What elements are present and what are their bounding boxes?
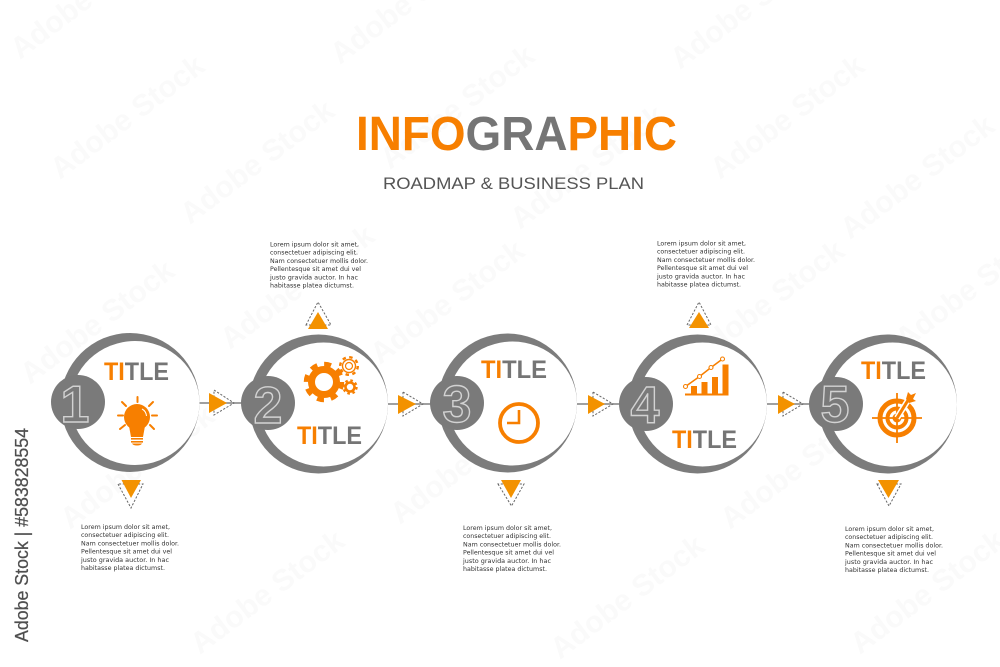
text block: step 3: justo gravida auctor. In hac [462, 557, 551, 565]
text block: step 1 [80, 523, 179, 572]
watermark: Adobe Stock [834, 109, 1000, 246]
text block: step 5: consectetuer adipiscing elit. [845, 533, 933, 541]
stock credit: Adobe Stock | #583828554 [12, 428, 32, 642]
connector arrow 4 to 5 [767, 392, 810, 416]
text block: step 1: habitasse platea dictumst. [81, 564, 165, 572]
text block: step 2: habitasse platea dictumst. [270, 282, 354, 290]
icon: growth chart [684, 357, 728, 396]
text block: step 4: habitasse platea dictumst. [657, 280, 741, 288]
watermark: Adobe Stock [44, 49, 211, 186]
connector arrow 3 to 4 [577, 392, 620, 416]
text block: step 5: Pellentesque sit amet dui vel [845, 550, 936, 558]
text block: step 5: Lorem ipsum dolor sit amet, [845, 525, 934, 533]
text block: step 5: Nam consectetuer mollis dolor. [845, 541, 943, 549]
panel: step 5 [809, 334, 957, 474]
watermark: Adobe Stock [184, 524, 351, 661]
watermark: Adobe Stock [714, 399, 881, 536]
panel: step 2 [241, 334, 388, 474]
pointer: step 5 down [877, 480, 901, 506]
watermark: Adobe Stock [364, 234, 531, 371]
text block: step 2: Nam consectetuer mollis dolor. [270, 257, 368, 265]
text block: step 3 [462, 524, 561, 573]
connector arrow 2 to 3 [387, 392, 431, 416]
text block: step 4: Lorem ipsum dolor sit amet, [657, 240, 746, 248]
text block: step 5: justo gravida auctor. In hac [844, 558, 933, 566]
watermark: Adobe Stock [704, 49, 871, 186]
text block: step 3: consectetuer adipiscing elit. [463, 532, 551, 540]
step 3 heading: TITLE [481, 356, 547, 384]
watermark: Adobe Stock [214, 219, 381, 356]
step 5 heading: TITLE [861, 357, 926, 385]
watermark: Adobe Stock [174, 94, 341, 231]
text block: step 2: Lorem ipsum dolor sit amet, [270, 240, 359, 248]
text block: step 3: Lorem ipsum dolor sit amet, [463, 524, 552, 532]
text block: step 1: Nam consectetuer mollis dolor. [81, 539, 179, 547]
number 4: 4 [631, 377, 660, 435]
text block: step 5: habitasse platea dictumst. [845, 566, 929, 574]
text block: step 4: justo gravida auctor. In hac [656, 272, 745, 280]
number 3: 3 [443, 376, 471, 434]
text block: step 5 [844, 525, 943, 574]
panel: step 4 [619, 334, 767, 474]
text block: step 4: consectetuer adipiscing elit. [657, 248, 745, 256]
text block: step 1: consectetuer adipiscing elit. [81, 531, 169, 539]
subtitle: ROADMAP & BUSINESS PLAN [383, 175, 644, 193]
pointer: step 4 up [687, 302, 711, 328]
watermark: Adobe Stock [684, 234, 851, 371]
text block: step 2: Pellentesque sit amet dui vel [270, 265, 361, 273]
watermark: Adobe Stock [54, 399, 221, 536]
watermark: Adobe Stock [14, 254, 181, 391]
watermark: Adobe Stock [384, 394, 551, 531]
text block: step 4 [656, 240, 755, 288]
icon: clock [500, 404, 538, 442]
watermark: Adobe Stock [374, 39, 541, 176]
number 2: 2 [254, 377, 282, 435]
pointer: step 1 down [118, 480, 143, 508]
icon: gears [306, 357, 358, 400]
panel: step 1 [51, 333, 200, 472]
text block: step 4: Pellentesque sit amet dui vel [657, 264, 748, 272]
step 2 heading: TITLE [297, 422, 362, 450]
icon: light bulb [118, 397, 157, 446]
watermark: Adobe Stock [504, 99, 671, 236]
step 1 heading: TITLE [104, 358, 169, 386]
step 4 heading: TITLE [672, 426, 737, 454]
text block: step 4: Nam consectetuer mollis dolor. [657, 256, 755, 264]
title: INFOGRAPHIC [356, 108, 677, 161]
watermark: Adobe Stock [544, 529, 711, 666]
number 1: 1 [61, 376, 89, 434]
pointer: step 3 down [498, 480, 524, 506]
text block: step 3: Pellentesque sit amet dui vel [463, 549, 554, 557]
text block: step 3: Nam consectetuer mollis dolor. [463, 540, 561, 548]
text block: step 1: justo gravida auctor. In hac [80, 556, 169, 564]
number 5: 5 [821, 376, 849, 434]
connector arrow 1 to 2 [198, 390, 242, 415]
text block: step 2: justo gravida auctor. In hac [269, 273, 358, 281]
icon: target with arrow [872, 392, 922, 443]
text block: step 1: Lorem ipsum dolor sit amet, [81, 523, 170, 531]
text block: step 2 [269, 240, 368, 290]
panel: step 3 [430, 334, 577, 472]
text block: step 1: Pellentesque sit amet dui vel [81, 548, 172, 556]
text block: step 3: habitasse platea dictumst. [463, 565, 547, 573]
text block: step 2: consectetuer adipiscing elit. [270, 249, 358, 257]
pointer: step 2 up [306, 302, 331, 329]
